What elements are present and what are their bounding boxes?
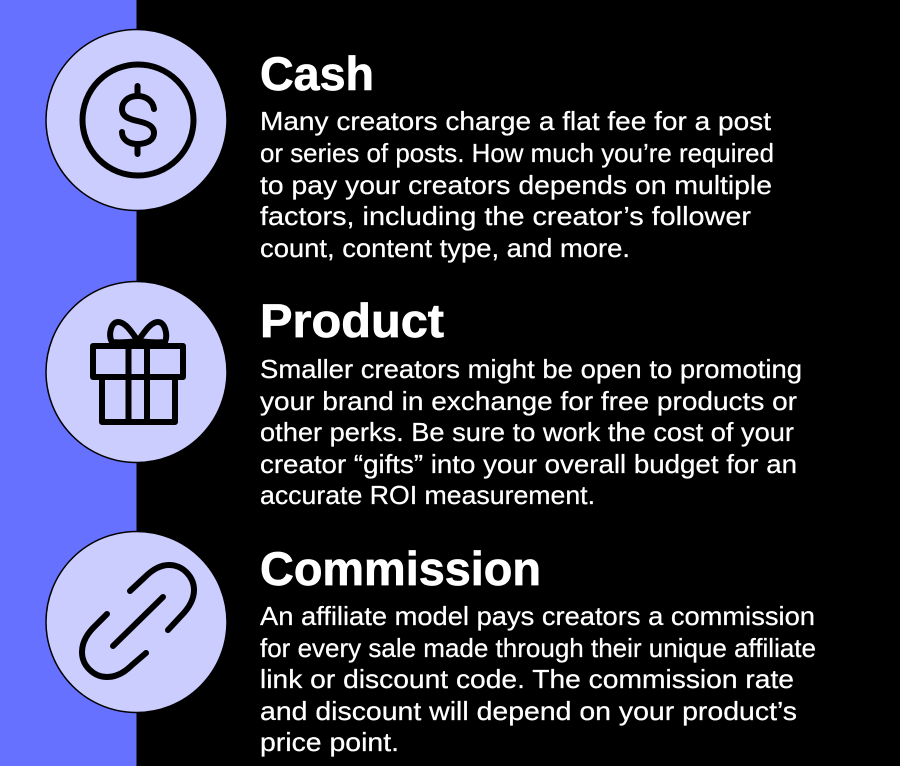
text: cash description: count, content type, and more. — [260, 233, 630, 263]
icon: chain link — [46, 532, 227, 712]
left stripe — [0, 0, 136, 766]
item: commission — [46, 532, 816, 757]
heading: Cash: Cash — [260, 47, 374, 100]
text: cash description: or series of posts. How much you’re required — [260, 138, 774, 168]
text: commission description — [260, 601, 816, 757]
text: cash description: factors, including the creator’s follower — [260, 201, 751, 231]
text: product description: accurate ROI measurement. — [260, 480, 595, 510]
text: cash description — [260, 106, 774, 263]
heading: Commission: Commission — [260, 542, 541, 595]
text: commission description: and discount will depend on your product’s — [260, 696, 797, 726]
text: product description — [260, 354, 802, 510]
text: product description: your brand in exchange for free products or — [260, 386, 797, 416]
text: commission description: An affiliate model pays creators a commission — [260, 601, 815, 631]
text: cash description: Many creators charge a flat fee for a post — [260, 106, 772, 136]
item: product — [46, 282, 802, 510]
text: commission description: price point. — [260, 727, 399, 757]
text: product description: creator “gifts” into your overall budget for an — [260, 449, 797, 479]
text: product description: other perks. Be sure to work the cost of your — [260, 417, 794, 447]
icon: dollar coin — [46, 30, 227, 210]
icon: gift box — [46, 282, 227, 462]
text: product description: Smaller creators might be open to promoting — [260, 354, 802, 384]
item: cash — [46, 30, 774, 263]
heading: Product: Product — [260, 294, 444, 347]
text: commission description: for every sale made through their unique affiliate — [260, 633, 816, 663]
text: cash description: to pay your creators depends on multiple — [260, 170, 772, 200]
text: commission description: link or discount code. The commission rate — [260, 664, 794, 694]
